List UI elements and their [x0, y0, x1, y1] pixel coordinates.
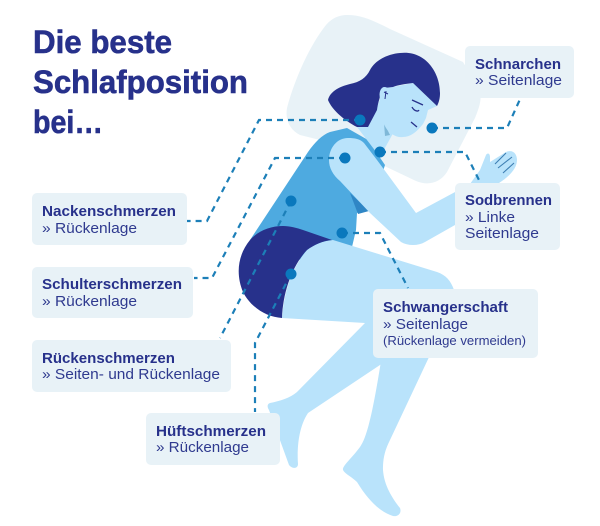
- callout: Rückenschmerzen: [32, 340, 231, 392]
- callout: Sodbrennen: [455, 183, 560, 250]
- callout: Sodbrennen: Seitenlage: [465, 225, 539, 242]
- title: Schlafposition: [33, 64, 248, 100]
- callout: Hüftschmerzen: » Rückenlage: [156, 439, 249, 456]
- eye and eyebrow: [412, 100, 423, 111]
- back leg: [268, 310, 415, 468]
- hair: [328, 53, 440, 127]
- callout: Schwangerschaft: [373, 289, 538, 358]
- title: [33, 24, 248, 140]
- sleeping figure: [239, 53, 517, 516]
- mouth: [411, 122, 417, 127]
- thigh: [282, 240, 454, 330]
- callout: Schulterschmerzen: » Rückenlage: [42, 293, 137, 310]
- title: bei…: [33, 104, 103, 140]
- callout: Nackenschmerzen: » Rückenlage: [42, 220, 137, 237]
- pillow: [287, 15, 481, 183]
- callout: Nackenschmerzen: [32, 193, 187, 245]
- torso: [250, 128, 385, 262]
- hand lines: [495, 153, 514, 173]
- callout: Schwangerschaft: Schwangerschaft: [383, 300, 508, 316]
- callout: Schwangerschaft: » Seitenlage: [383, 316, 468, 333]
- callout: Schulterschmerzen: [32, 267, 193, 318]
- callout: Schnarchen: » Seitenlage: [475, 72, 562, 89]
- callout: Nackenschmerzen: Nackenschmerzen: [42, 204, 176, 220]
- callout: Schnarchen: Schnarchen: [475, 57, 561, 73]
- callout: Rückenschmerzen: Rückenschmerzen: [42, 351, 175, 367]
- dotted connector: Schnarchen: [432, 97, 521, 128]
- callout: Sodbrennen: » Linke: [465, 209, 515, 226]
- dotted connector: Hüftschmerzen: [255, 274, 291, 412]
- callout: Hüftschmerzen: [146, 413, 280, 465]
- callout: Rückenschmerzen: » Seiten- und Rückenlage: [42, 366, 220, 383]
- underwear: [239, 226, 332, 318]
- callout: Hüftschmerzen: Hüftschmerzen: [156, 424, 266, 440]
- neck shadow: [384, 123, 390, 136]
- dotted connector: Sodbrennen: [380, 152, 480, 182]
- callout: Schwangerschaft: (Rückenlage vermeiden): [383, 333, 526, 348]
- ear: [380, 87, 390, 105]
- callout: Sodbrennen: Sodbrennen: [465, 193, 552, 209]
- title: Die beste: [33, 24, 172, 60]
- dotted connector: Rückenschmerzen: [220, 201, 291, 338]
- face: [376, 83, 437, 137]
- callout: Schulterschmerzen: Schulterschmerzen: [42, 277, 182, 293]
- dotted connector: Nackenschmerzen: [187, 120, 360, 221]
- front leg: [343, 355, 430, 516]
- sleeve fold: [350, 193, 369, 214]
- callout: Schnarchen: [465, 46, 574, 98]
- arm and hand: [329, 138, 517, 245]
- dotted connector: Schulterschmerzen: [194, 158, 345, 278]
- dotted connector: Schwangerschaft: [342, 233, 408, 288]
- marker dots: [286, 114, 438, 280]
- neck: [357, 105, 400, 157]
